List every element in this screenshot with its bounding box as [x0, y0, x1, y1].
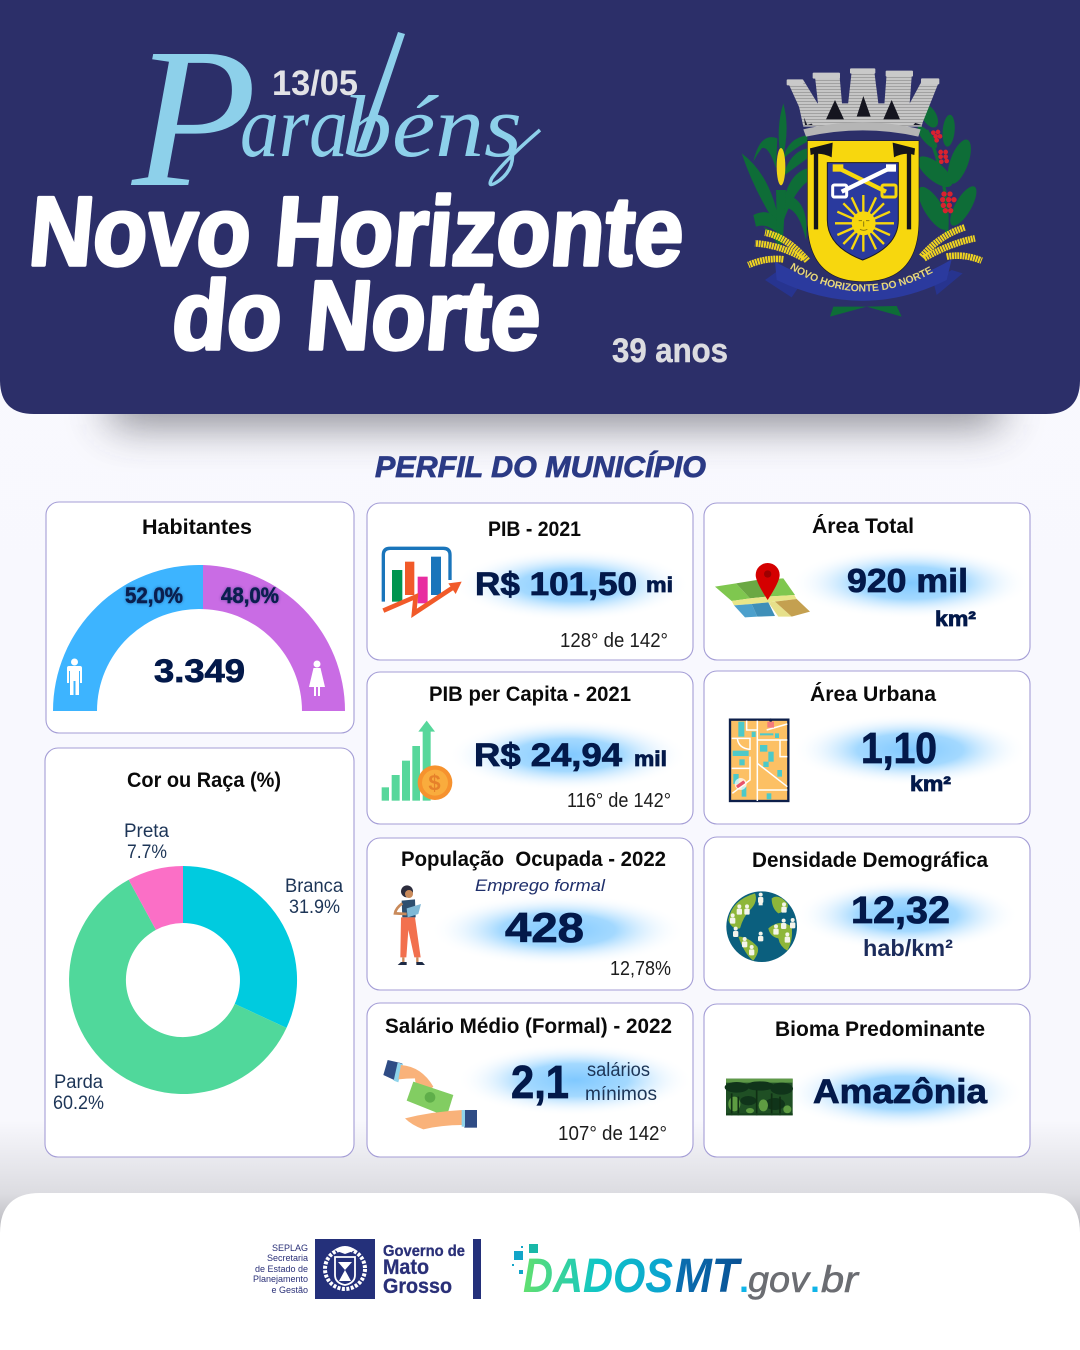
gauge chart [53, 565, 345, 711]
government name: Governo de [383, 1243, 465, 1260]
total population: 3.349 [154, 653, 245, 689]
unit: mínimos [585, 1084, 657, 1105]
unit: hab/km² [863, 935, 953, 961]
female share: 48,0% [221, 583, 279, 608]
ranking: 128° de 142° [560, 630, 668, 652]
government name: Grosso [383, 1275, 452, 1298]
icon: city map [730, 718, 788, 801]
value: 12,32 [851, 890, 950, 932]
logo: DadosMT [512, 1244, 860, 1303]
ranking: 107° de 142° [558, 1123, 667, 1145]
icon: growth bars and coin: $ [428, 771, 441, 796]
logo: DadosMT: MT [675, 1250, 742, 1303]
logo: DadosMT: . [739, 1259, 749, 1300]
script title: Parabéns: ara [240, 79, 348, 176]
logo: DadosMT: DADOS [523, 1250, 673, 1303]
ranking: 116° de 142° [567, 790, 671, 812]
unit: km² [910, 773, 951, 796]
label: Parda [53, 1072, 104, 1114]
heading: Cor ou Raça (%) [127, 769, 281, 792]
label: Branca [285, 876, 343, 918]
heading: Área Total [812, 515, 914, 538]
subtitle: Emprego formal [475, 876, 606, 895]
male share: 52,0% [125, 583, 183, 608]
section heading: PERFIL DO MUNICÍPIO [375, 450, 706, 484]
script title: Parabéns [130, 8, 540, 229]
icon: bar chart with arrow [383, 548, 462, 613]
female share: 48,0% [221, 583, 279, 608]
value: 428 [505, 904, 584, 951]
icon: growth bars and coin [382, 721, 452, 801]
icon: globe with people [726, 891, 797, 962]
panel: Bioma Predominante [704, 1004, 1030, 1157]
value: R$ 101,50 [475, 566, 637, 602]
icon: man [67, 658, 82, 695]
SEPLAG caption: Secretaria [267, 1253, 308, 1263]
label: Preta [124, 821, 169, 863]
value: R$ 24,94 [474, 737, 622, 773]
coat of arms [742, 68, 983, 316]
donut chart [69, 866, 297, 1094]
icon: map with pin [715, 563, 810, 617]
SEPLAG caption: de Estado de [255, 1264, 308, 1274]
logo: DadosMT: gov [748, 1259, 812, 1300]
label: Branca: Branca [285, 876, 343, 897]
SEPLAG caption: SEPLAG [272, 1243, 308, 1253]
icon: hands and banknote [383, 1060, 477, 1129]
SEPLAG caption: Planejamento [253, 1274, 308, 1284]
label: Parda: 60.2% [53, 1093, 104, 1114]
age: 39 anos [612, 332, 728, 370]
panel: Área Urbana [704, 671, 1030, 824]
unit [585, 1060, 657, 1105]
icon: woman [309, 660, 325, 696]
script title: Parabéns: P [130, 8, 257, 229]
unit: km² [935, 608, 976, 631]
SEPLAG caption [253, 1243, 308, 1295]
panel: Área Total [704, 503, 1030, 660]
script title: Parabéns: éns [392, 79, 522, 176]
logo: DadosMT: br [821, 1259, 860, 1300]
municipality name: Novo Horizonte [25, 176, 689, 286]
male share: 52,0% [125, 583, 183, 608]
value: Amazônia [813, 1073, 988, 1111]
panel: Habitantes [46, 502, 354, 733]
unit: salários [587, 1060, 650, 1081]
government name [383, 1243, 465, 1298]
panel: PIB [367, 503, 693, 660]
emblem [315, 1239, 375, 1299]
value: 1,10 [861, 724, 937, 773]
logo: Governo de Mato Grosso [253, 1239, 481, 1299]
government name: Mato [383, 1256, 429, 1279]
heading: Bioma Predominante [775, 1018, 985, 1041]
municipality name: do Norte [168, 260, 546, 370]
heading: Densidade Demográfica [752, 849, 988, 872]
label: Preta: Preta [124, 821, 169, 842]
unit: mil [634, 748, 667, 771]
footer [0, 1193, 1080, 1350]
heading: PIB per Capita - 2021 [429, 683, 631, 706]
coat of arms: NOVO HORIZONTE DO NORTE [790, 262, 933, 292]
heading: PIB - 2021 [488, 518, 581, 541]
panel: População Ocupada [367, 838, 693, 990]
header banner [0, 0, 1080, 414]
municipality name [25, 176, 689, 370]
label: Branca: 31.9% [289, 897, 340, 918]
script title: Parabéns: b [342, 79, 392, 176]
heading: População Ocupada - 2022 [401, 848, 666, 871]
heading: Área Urbana [810, 683, 936, 706]
heading: Habitantes [142, 516, 252, 539]
label: Parda: Parda [54, 1072, 103, 1093]
heading: Salário Médio (Formal) - 2022 [385, 1015, 672, 1038]
icon: forest [725, 1079, 793, 1115]
logo: DadosMT: . [810, 1259, 820, 1300]
unit: mi [646, 574, 673, 597]
share: 12,78% [610, 958, 671, 980]
value: 920 mil [847, 562, 968, 599]
panel: PIB per Capita [367, 672, 693, 824]
icon: woman with book [395, 885, 425, 965]
date: 13/05 [272, 64, 358, 103]
value: 2,1 [511, 1056, 569, 1108]
panel: Cor ou Raça [45, 748, 354, 1157]
panel: Densidade Demográfica [704, 837, 1030, 990]
SEPLAG caption: e Gestão [271, 1285, 308, 1295]
panel: Salário Médio [367, 1003, 693, 1157]
label: Preta: 7.7% [127, 842, 167, 863]
